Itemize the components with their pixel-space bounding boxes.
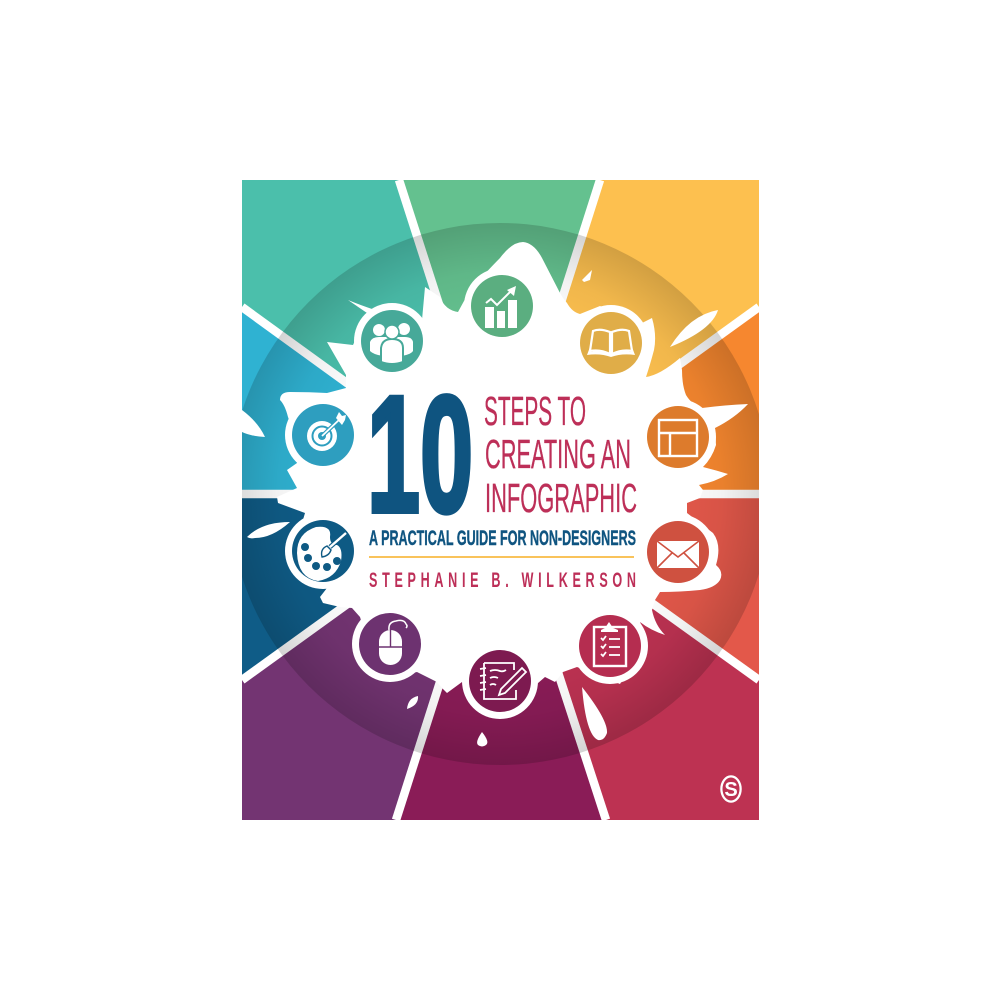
title line 1: STEPS TO	[484, 388, 586, 434]
icon halos	[285, 268, 716, 719]
big number 10: 10	[367, 361, 473, 547]
publisher logo: S	[724, 779, 738, 801]
wedge: green	[404, 180, 596, 312]
splat drop: maroon drop	[477, 732, 487, 746]
author: STEPHANIE B. WILKERSON	[369, 568, 636, 592]
wedge: crimson	[562, 608, 759, 820]
splat drop: yellow diamond	[582, 270, 592, 282]
wedge: maroon	[400, 677, 602, 820]
icon: envelope	[647, 521, 709, 583]
title line 2: CREATING AN	[485, 431, 631, 477]
icon: notepad and pencil	[469, 650, 531, 712]
title line 3: INFOGRAPHIC	[485, 475, 637, 521]
icon: page layout	[647, 406, 709, 468]
splat drop: left leaf	[242, 410, 265, 437]
divider rule	[369, 556, 634, 558]
subtitle: A PRACTICAL GUIDE FOR NON-DESIGNERS	[369, 527, 636, 550]
wedge: teal	[242, 180, 430, 377]
coloured wedge background	[229, 180, 771, 820]
icon: bar chart	[471, 275, 533, 337]
splat drop: crimson teardrop	[582, 687, 607, 740]
book cover infographic	[242, 180, 759, 820]
title	[484, 388, 637, 521]
wedge: yellow	[566, 180, 759, 377]
icon: checklist clipboard	[579, 615, 641, 677]
wedge: purple	[242, 608, 436, 820]
icon: paint palette	[292, 520, 354, 582]
wedge: orange	[682, 312, 759, 490]
wedge: coral	[655, 498, 759, 675]
icon: target with dart	[292, 404, 354, 466]
publisher logo	[721, 776, 741, 802]
splat drop: yellow ellipse	[670, 310, 718, 347]
wedge: sky blue	[242, 312, 346, 490]
wedge: navy	[242, 498, 338, 675]
white paint splat	[242, 242, 748, 746]
splat drop: purple leaf	[407, 696, 418, 709]
shaded ring	[229, 223, 771, 765]
icon: computer mouse	[359, 613, 421, 675]
splat drop: navy leaf	[247, 522, 290, 538]
icon: open book	[580, 312, 642, 374]
icon: people	[361, 310, 423, 372]
